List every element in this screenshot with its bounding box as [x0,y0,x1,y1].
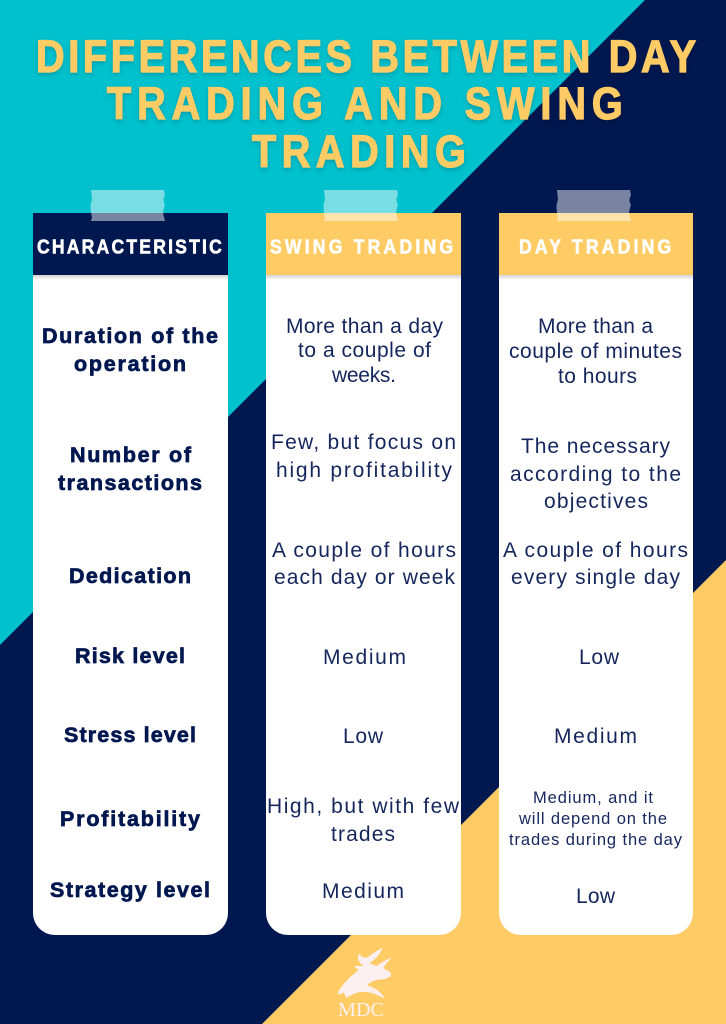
swing trading values: Few, but focus on [271,431,456,454]
icon: bull head [337,948,392,999]
row labels: Strategy level [50,878,210,902]
row labels: Dedication [69,564,191,588]
swing trading values: Medium [323,646,406,669]
day trading values: to hours [558,365,637,388]
swing trading values: to a couple of [298,339,431,362]
icon: tape [556,190,631,221]
day trading values: Low [576,885,616,908]
card body [33,213,228,935]
background: cyan diagonal [0,0,645,645]
logo: MDC bull [337,948,392,1021]
swing trading values: high profitability [276,459,452,482]
day trading values: A couple of hours [503,539,688,562]
day trading values: every single day [511,566,680,589]
panel: day trading column [499,190,693,935]
row labels [42,324,218,902]
day trading values: trades during the day [509,831,683,849]
swing trading values: Low [343,725,384,748]
day trading values: couple of minutes [509,340,682,363]
row labels: Stress level [64,723,196,747]
row labels: Number of [70,443,192,467]
row labels: Risk level [75,644,185,668]
title: TRADING [252,127,466,177]
icon: tape [90,190,165,221]
row labels: operation [74,352,186,376]
title: DIFFERENCES BETWEEN DAY [36,32,696,82]
icon: tape [324,190,398,221]
swing trading values: Medium [322,880,404,903]
day trading values: objectives [544,490,648,513]
column header [266,213,461,280]
row labels: transactions [58,471,202,495]
day trading values: Medium, and it [533,789,653,807]
title: TRADING AND SWING [107,79,623,129]
swing trading values: High, but with few [267,795,460,818]
swing trading values: trades [331,823,395,846]
panel: swing trading column [266,190,461,935]
day trading values: will depend on the [518,810,667,828]
column header: CHARACTERISTIC [37,235,222,258]
day trading values: More than a [538,315,653,338]
column header: SWING TRADING [270,235,453,258]
title [36,32,696,177]
swing trading values [267,315,460,903]
day trading values: according to the [510,463,681,486]
day trading values: Medium [554,725,637,748]
row labels: Duration of the [42,324,218,348]
logo wordmark: MDC [338,999,384,1021]
day trading values: The necessary [521,435,670,458]
background: yellow diagonal [262,560,726,1024]
swing trading values: each day or week [274,566,456,589]
day trading values: Low [579,646,620,669]
row labels: Profitability [60,807,200,831]
column header [499,213,693,280]
card body [266,213,461,935]
swing trading values: More than a day [286,315,444,338]
column header: DAY TRADING [519,235,671,258]
card body [499,213,693,935]
column header [33,213,228,280]
day trading values [503,315,688,908]
swing trading values: weeks. [331,364,396,387]
swing trading values: A couple of hours [272,539,456,562]
panel: characteristic column [33,190,228,935]
